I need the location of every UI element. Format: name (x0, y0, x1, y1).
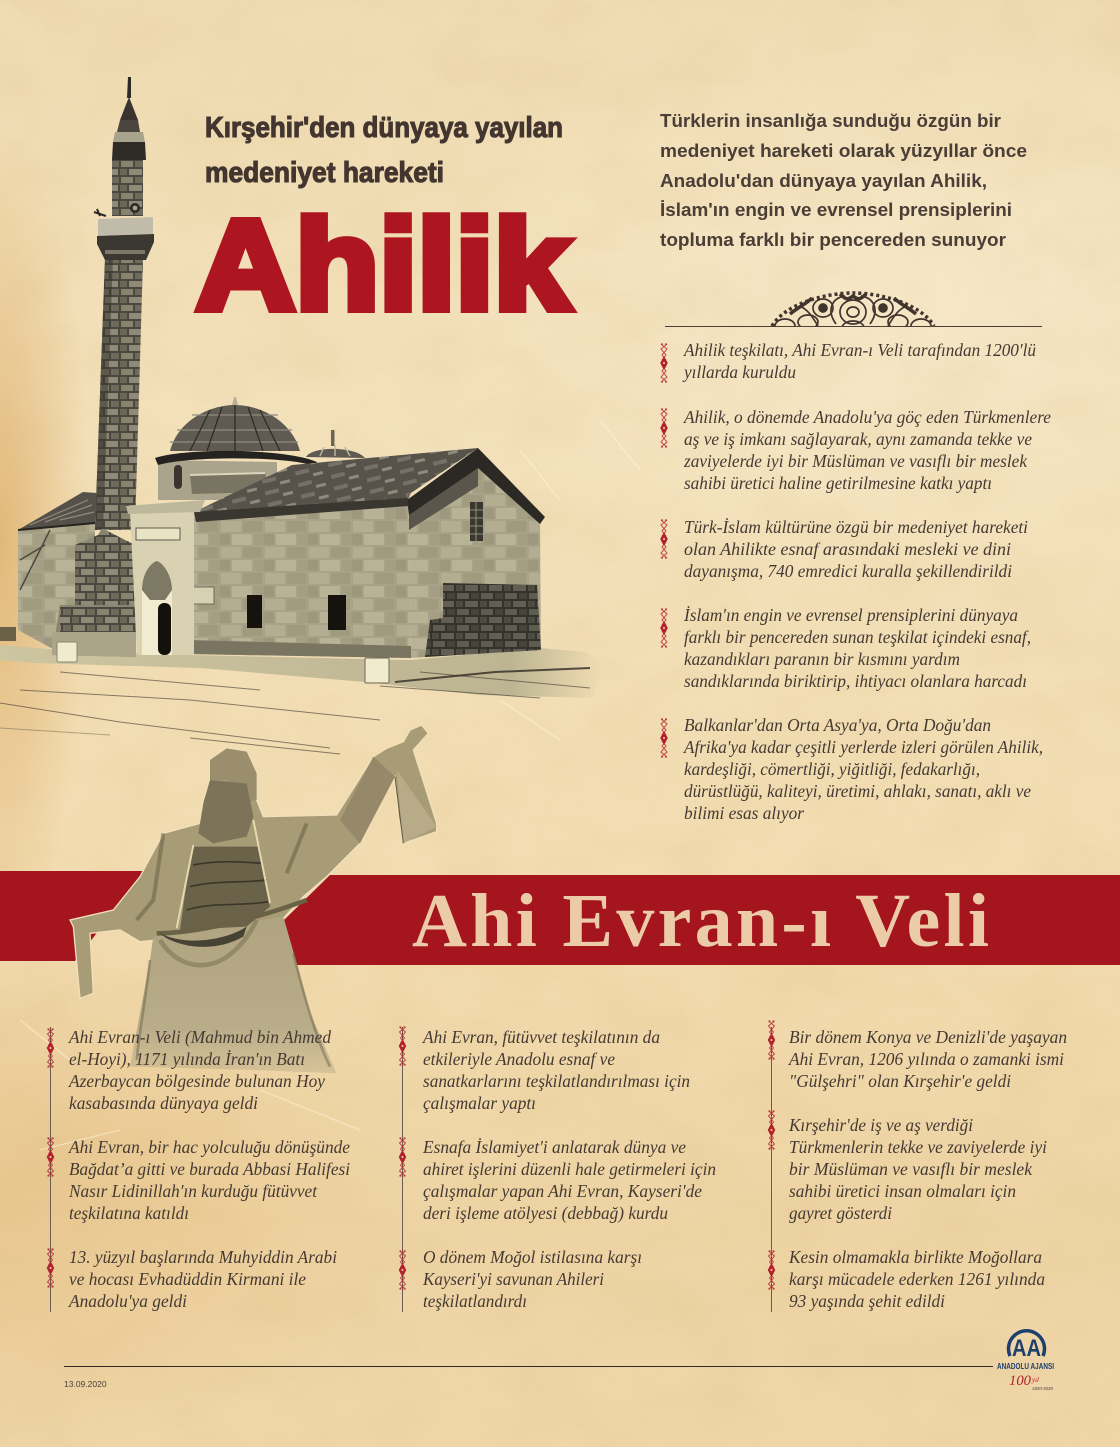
fact 2: aş ve iş imkanı sağlayarak, aynı zamanda tekke ve (684, 429, 1032, 449)
date: 13.09.2020 (64, 1379, 107, 1389)
column 2: biography: deri işleme atölyesi (debbağ) kurdu (423, 1203, 668, 1223)
intro text: medeniyet hareketi olarak yüzyıllar önce (660, 141, 1027, 161)
fact 5: Afrika'ya kadar çeşitli yerlerde izleri görülen Ahilik, (683, 737, 1043, 757)
ground (0, 645, 602, 754)
column 2: biography: Esnafa İslamiyet'i anlatarak dünya ve (422, 1137, 686, 1157)
column 2: biography: O dönem Moğol istilasına karşı (423, 1247, 642, 1267)
intro text: topluma farklı bir pencereden sunuyor (660, 230, 1006, 250)
subtitle (205, 112, 563, 189)
fact 5: dürüstlüğü, kaliteyi, üretimi, ahlakı, sanatı, aklı ve (684, 781, 1031, 801)
ornament: mandala divider (665, 291, 1042, 327)
column 3: biography: bir Müslüman ve vasıflı bir meslek (789, 1159, 1033, 1179)
column 1: biography: Ahi Evran-ı Veli (Mahmud bin Ahmed (68, 1027, 331, 1047)
roof (194, 448, 545, 524)
logo: Anadolu Ajansı (997, 1331, 1054, 1391)
fact 4: İslam'ın engin ve evrensel prensiplerini dünyaya (683, 605, 1018, 625)
column 2: biography: ahiret işlerini düzenli hale getirmeleri için (423, 1159, 716, 1179)
column 1: biography: teşkilatına katıldı (69, 1203, 189, 1223)
fact 4: sandıklarında biriktirip, ihtiyacı olanlara harcadı (684, 671, 1027, 691)
column 3: biography: Kesin olmamakla birlikte Moğollara (788, 1247, 1042, 1267)
column 3: biography: Ahi Evran, 1206 yılında o zamanki ismi (788, 1049, 1064, 1069)
column 3: biography: sahibi üretici insan olmaları için (789, 1181, 1016, 1201)
column 3: biography: Türkmenlerin tekke ve zaviyelerde iyi (789, 1137, 1047, 1157)
intro text: İslam'ın engin ve evrensel prensiplerini (660, 200, 1012, 220)
column 2: biography (399, 1027, 716, 1312)
logo: Anadolu Ajansı: 1920-2020 (1032, 1386, 1053, 1391)
dome and drum (155, 397, 365, 500)
fact 2: zaviyelerde iyi bir Müslüman ve vasıflı bir meslek (683, 451, 1028, 471)
fact 4: farklı bir pencereden sunan teşkilat içindeki esnaf, (684, 627, 1031, 647)
logo: Anadolu Ajansı: 100 (1009, 1373, 1031, 1389)
fact 1: yıllarda kuruldu (682, 362, 796, 382)
fact 5: Balkanlar'dan Orta Asya'ya, Orta Doğu'dan (684, 715, 991, 735)
subtitle: medeniyet hareketi (205, 157, 444, 189)
column 3: biography: 93 yaşında şehit edildi (789, 1291, 945, 1311)
fact 4 (660, 605, 1031, 691)
minaret base (52, 528, 136, 657)
column 1: biography: ve hocası Evhadüddin Kirmani ile (69, 1269, 306, 1289)
footer rule (64, 1366, 993, 1368)
column 2: biography: çalışmalar yapan Ahi Evran, Kayseri'de (423, 1181, 702, 1201)
intro text (660, 111, 1027, 250)
minaret shaft (94, 77, 154, 530)
column 1: biography (47, 1027, 350, 1312)
bench and bins (0, 627, 389, 683)
red band (0, 871, 1120, 965)
illustration: mosque with minaret (0, 77, 602, 754)
column 2: biography: çalışmalar yaptı (423, 1093, 536, 1113)
list: Ahilik facts (660, 340, 1051, 823)
column 1: biography: Anadolu'ya geldi (68, 1291, 187, 1311)
heading: Ahi Evran-ı Veli: Ahi Evran-ı Veli (412, 879, 989, 963)
fact 1: Ahilik teşkilatı, Ahi Evran-ı Veli tarafından 1200'lü (683, 340, 1036, 360)
column 2: biography: teşkilatlandırdı (423, 1291, 527, 1311)
title: Ahilik: Ahilik (196, 194, 571, 337)
column 3: biography: "Gülşehri" olan Kırşehir'e geldi (789, 1071, 1011, 1091)
column 2: biography: sanatkarlarını teşkilatlandırılması için (423, 1071, 690, 1091)
column 1: biography: kasabasında dünyaya geldi (69, 1093, 258, 1113)
fact 5: kardeşliği, cömertliği, yiğitliği, fedakarlığı, (684, 759, 980, 779)
fact 3 (660, 517, 1028, 581)
subtitle: Kırşehir'den dünyaya yayılan (205, 112, 563, 144)
fact 5 (660, 715, 1043, 823)
column 2: biography: Kayseri'yi savunan Ahileri (422, 1269, 604, 1289)
column 3: biography: Bir dönem Konya ve Denizli'de yaşayan (789, 1027, 1067, 1047)
intro text: Türklerin insanlığa sunduğu özgün bir (660, 111, 1001, 131)
fact 2: sahibi üretici haline getirilmesine katkı yaptı (684, 473, 992, 493)
fact 1 (660, 340, 1036, 382)
column 3: biography: gayret gösterdi (789, 1203, 892, 1223)
column 1: biography: Nasır Lidinillah'ın kurduğu fütüvvet (68, 1181, 318, 1201)
column 3: biography (768, 1021, 1067, 1312)
portal (126, 500, 205, 655)
column 2: biography: Ahi Evran, fütüvvet teşkilatının da (422, 1027, 660, 1047)
logo: Anadolu Ajansı: AA (1012, 1335, 1041, 1362)
fact 3: Türk-İslam kültürüne özgü bir medeniyet hareketi (684, 517, 1028, 537)
column 1: biography: Azerbaycan bölgesinde bulunan Hoy (68, 1071, 325, 1091)
main wall (188, 455, 541, 658)
logo: Anadolu Ajansı: yıl (1031, 1376, 1039, 1384)
fact 2 (660, 407, 1051, 493)
column 3: biography: karşı mücadele ederken 1261 yılında (789, 1269, 1045, 1289)
fact 5: bilimi esas alıyor (684, 803, 804, 823)
fact 2: Ahilik, o dönemde Anadolu'ya göç eden Türkmenlere (683, 407, 1051, 427)
column 1: biography: Bağdat’a gitti ve burada Abbasi Halifesi (69, 1159, 350, 1179)
column 1: biography: 13. yüzyıl başlarında Muhyiddin Arabi (69, 1247, 337, 1267)
column 1: biography: el-Hoyi), 1171 yılında İran'ın Batı (69, 1049, 305, 1069)
fact 4: kazandıkları paranın bir kısmını yardım (684, 649, 960, 669)
column 2: biography: etkileriyle Anadolu esnaf ve (423, 1049, 615, 1069)
statue of Ahi Evran (70, 725, 437, 1073)
fact 3: dayanışma, 740 emredici kuralla şekillendirildi (684, 561, 1012, 581)
logo: Anadolu Ajansı: ANADOLU AJANSI (997, 1361, 1054, 1371)
windows (193, 502, 483, 630)
left wing (18, 492, 97, 648)
fact 3: olan Ahilikte esnaf arasındaki mesleki ve dini (684, 539, 1011, 559)
intro text: Anadolu'dan dünyaya yayılan Ahilik, (660, 171, 987, 191)
column 1: biography: Ahi Evran, bir hac yolculuğu dönüşünde (68, 1137, 350, 1157)
column 3: biography: Kırşehir'de iş ve aş verdiği (788, 1115, 973, 1135)
